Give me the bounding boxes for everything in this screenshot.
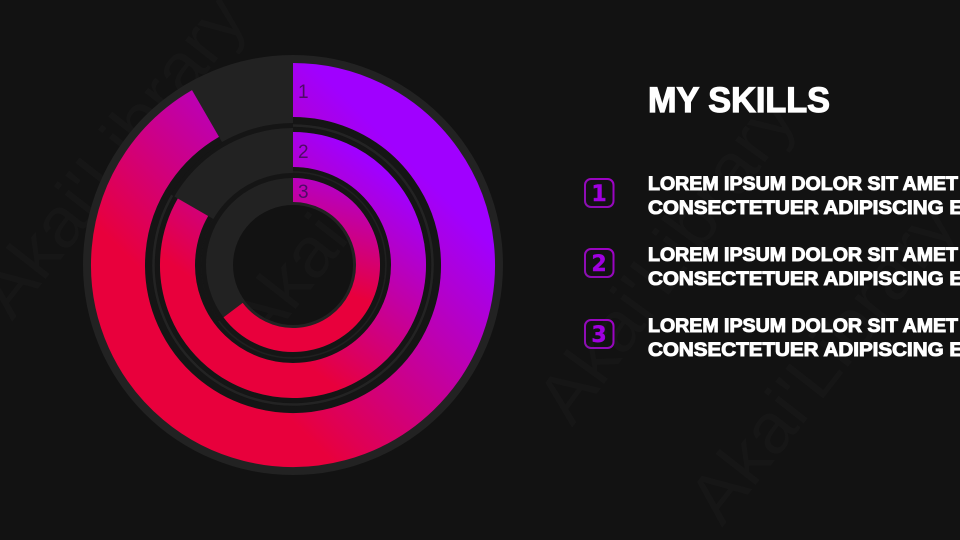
- list item 2: [585, 244, 960, 290]
- badge 3: [585, 320, 614, 348]
- badge 2: [585, 249, 614, 277]
- list item 1: [585, 173, 960, 219]
- ring label 3: 3: [298, 182, 309, 203]
- ring 2 shadow inner: [198, 170, 388, 360]
- ring 2 value arc: [177, 150, 408, 380]
- badge 1: [585, 179, 614, 207]
- track separator inner: [204, 176, 382, 354]
- watermark: centre right: Akai'Library: [521, 79, 810, 437]
- ring label 2: 2: [298, 142, 309, 163]
- ring 2 shadow outer: [157, 130, 428, 401]
- watermark: lower right: Akai'Library: [672, 186, 960, 537]
- gap highlight outer: [154, 126, 433, 404]
- ring 3 value arc: [233, 190, 368, 340]
- ring 1 shadow: [149, 120, 438, 410]
- list item 3: [585, 315, 960, 361]
- ring label 1: 1: [298, 82, 309, 103]
- item 1 text: LOREM IPSUM DOLOR SIT AMET: [648, 173, 958, 195]
- title: MY SKILLS: [648, 81, 830, 120]
- badge 2: 2: [591, 252, 607, 277]
- track separator outer: [154, 126, 432, 404]
- badge 1: 1: [591, 182, 607, 207]
- radial skills chart: [83, 55, 503, 475]
- watermark seen through chart hole: Akai'Library: [212, 10, 511, 361]
- item 3 text: LOREM IPSUM DOLOR SIT AMET: [648, 315, 958, 337]
- item 2 text: LOREM IPSUM DOLOR SIT AMET: [648, 244, 958, 266]
- ring 1 value arc: [118, 90, 468, 440]
- badge 3: 3: [591, 323, 607, 348]
- gap highlight inner: [219, 172, 386, 358]
- chart base disc: [83, 55, 503, 475]
